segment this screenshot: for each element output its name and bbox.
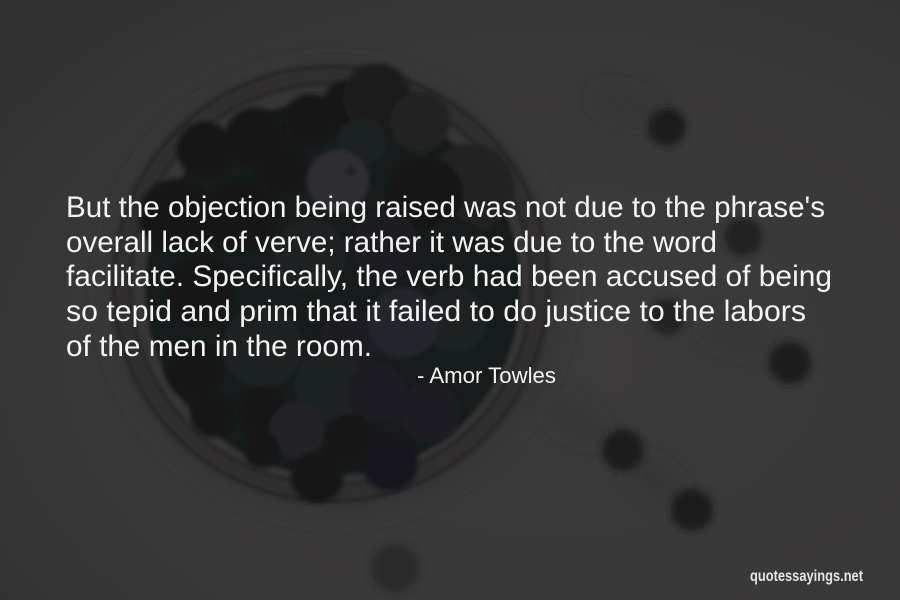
scattered blueberries	[371, 85, 811, 592]
quote text: of the men in the room.	[66, 330, 372, 363]
watermark: quotessayings.net	[750, 568, 864, 585]
attribution: - Amor Towles	[417, 363, 556, 388]
quote text: facilitate. Specifically, the verb had been accused of being	[66, 260, 832, 293]
bowl shadow	[105, 64, 565, 516]
quote text	[66, 191, 832, 363]
quote text: But the objection being raised was not due to the phrase's	[66, 191, 825, 224]
glass bowl	[112, 65, 550, 503]
quote text: so tepid and prim that it failed to do justice to the labors	[66, 295, 806, 328]
blueberries in bowl	[139, 63, 514, 503]
quote text: overall lack of verve; rather it was due to the word	[66, 226, 717, 259]
